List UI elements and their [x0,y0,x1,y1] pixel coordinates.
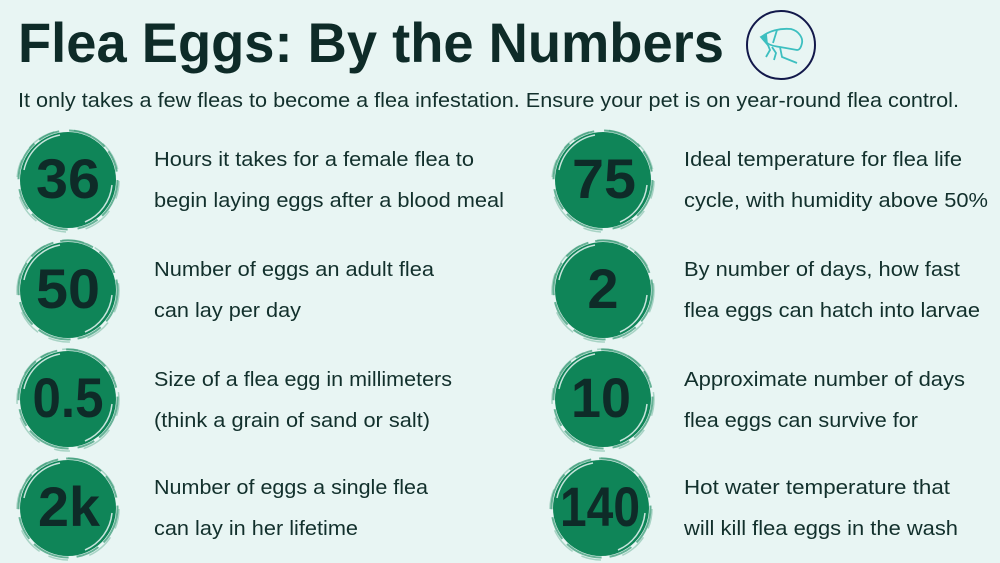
badge: 140: 140 [560,475,640,538]
badge: 75: 75 [572,147,636,210]
icon: flea logo [747,11,815,79]
stat: 10 days [552,349,965,451]
badge: 10 [552,349,654,451]
stat: 0.5 mm [17,349,452,451]
description: (think a grain of sand or salt) [154,409,430,432]
badge: 50: 50 [36,257,100,320]
badge: 2k [17,458,119,560]
badge: 10: 10 [571,366,631,429]
description: cycle, with humidity above 50% [684,189,988,212]
description: Number of eggs a single flea [154,476,429,499]
stat: 75 degrees [552,130,988,232]
description: Size of a flea egg in millimeters [154,368,452,391]
description: can lay per day [154,299,302,322]
description: Ideal temperature for flea life [684,148,962,171]
description: Number of eggs an adult flea [154,258,435,281]
badge: 75 [552,130,654,232]
description: Hot water temperature that [684,476,950,499]
description: Hours it takes for a female flea to [154,148,474,171]
badge: 2 [552,240,654,342]
badge: 36 [17,130,119,232]
badge: 0.5: 0.5 [32,366,104,429]
description: flea eggs can survive for [684,409,918,432]
stat: 36 hours [17,130,504,232]
badge: 36: 36 [36,147,100,210]
subtitle: It only takes a few fleas to become a flea infestation. Ensure your pet is on year-round flea control. [18,89,959,112]
stat: 2k eggs [17,458,429,560]
badge: 2: 2 [587,257,619,320]
description: Approximate number of days [684,368,965,391]
stat: 140 degrees [550,458,958,560]
badge: 50 [17,240,119,342]
stat: 2 days [552,240,980,342]
badge: 0.5 [17,349,119,451]
description: can lay in her lifetime [154,517,358,540]
stat: 50 eggs [17,240,435,342]
description: begin laying eggs after a blood meal [154,189,504,212]
title: Flea Eggs: By the Numbers [18,11,724,74]
description: By number of days, how fast [684,258,960,281]
description: flea eggs can hatch into larvae [684,299,980,322]
badge: 140 [550,458,652,560]
description: will kill flea eggs in the wash [683,517,958,540]
badge: 2k: 2k [38,475,101,538]
